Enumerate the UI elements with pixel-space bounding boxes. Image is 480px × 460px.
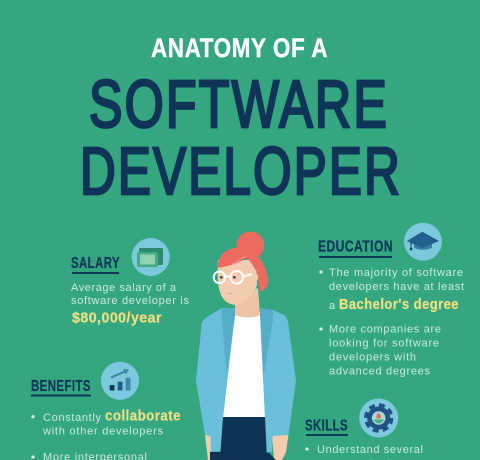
- benefits text: with other developers: [42, 426, 164, 438]
- illustration: developer figure: [196, 232, 296, 460]
- salary text: Average salary of a: [71, 282, 177, 294]
- hair bun: [236, 232, 264, 260]
- education text: developers with: [329, 352, 416, 364]
- education text: The majority of software: [329, 267, 463, 279]
- icon: gear: [359, 398, 398, 438]
- hair highlight: [232, 256, 245, 264]
- heading: salary: SALARY: [71, 255, 120, 272]
- education text: looking for software: [329, 338, 439, 350]
- heading: education: [318, 238, 393, 258]
- lapels: [222, 308, 273, 378]
- benefits text: collaborate: [105, 408, 181, 424]
- t-shirt: [223, 312, 265, 417]
- icon: money: [132, 238, 170, 276]
- title: ANATOMY OF A: [151, 33, 328, 63]
- icon: graduation cap: [404, 223, 442, 261]
- trousers: [210, 416, 276, 460]
- hands: [205, 435, 288, 460]
- education text: Bachelor's degree: [339, 296, 459, 313]
- benefits text: [31, 408, 181, 460]
- face: [218, 260, 257, 305]
- education text: advanced degrees: [329, 366, 430, 378]
- heading: benefits: BENEFITS: [31, 378, 91, 395]
- neck: [235, 288, 260, 318]
- heading: benefits: [31, 378, 91, 396]
- heading: education: EDUCATION: [318, 238, 393, 256]
- benefits text: Constantly: [43, 412, 102, 424]
- panel: education: [318, 223, 464, 378]
- hair: [218, 248, 268, 292]
- salary text: $80,000/year: [72, 310, 162, 326]
- ear: [252, 274, 259, 280]
- heading: skills: SKILLS: [305, 418, 348, 434]
- salary text: software developer is: [71, 295, 190, 307]
- panel: skills: [305, 398, 442, 460]
- jacket: [196, 308, 296, 453]
- panel: benefits: [31, 362, 181, 460]
- icon: growth chart: [101, 362, 139, 400]
- title: SOFTWARE: [89, 67, 389, 142]
- eyes and mouth: [220, 276, 236, 294]
- education text: developers have at least: [329, 281, 464, 293]
- title: [80, 33, 402, 209]
- education text: a: [329, 300, 336, 312]
- skills text: Understand several: [317, 444, 423, 456]
- education text: More companies are: [329, 324, 441, 336]
- salary text: [71, 282, 190, 326]
- skills text: [305, 444, 442, 460]
- education text: [319, 267, 464, 378]
- panel: salary: [71, 238, 190, 326]
- glasses: [214, 271, 252, 284]
